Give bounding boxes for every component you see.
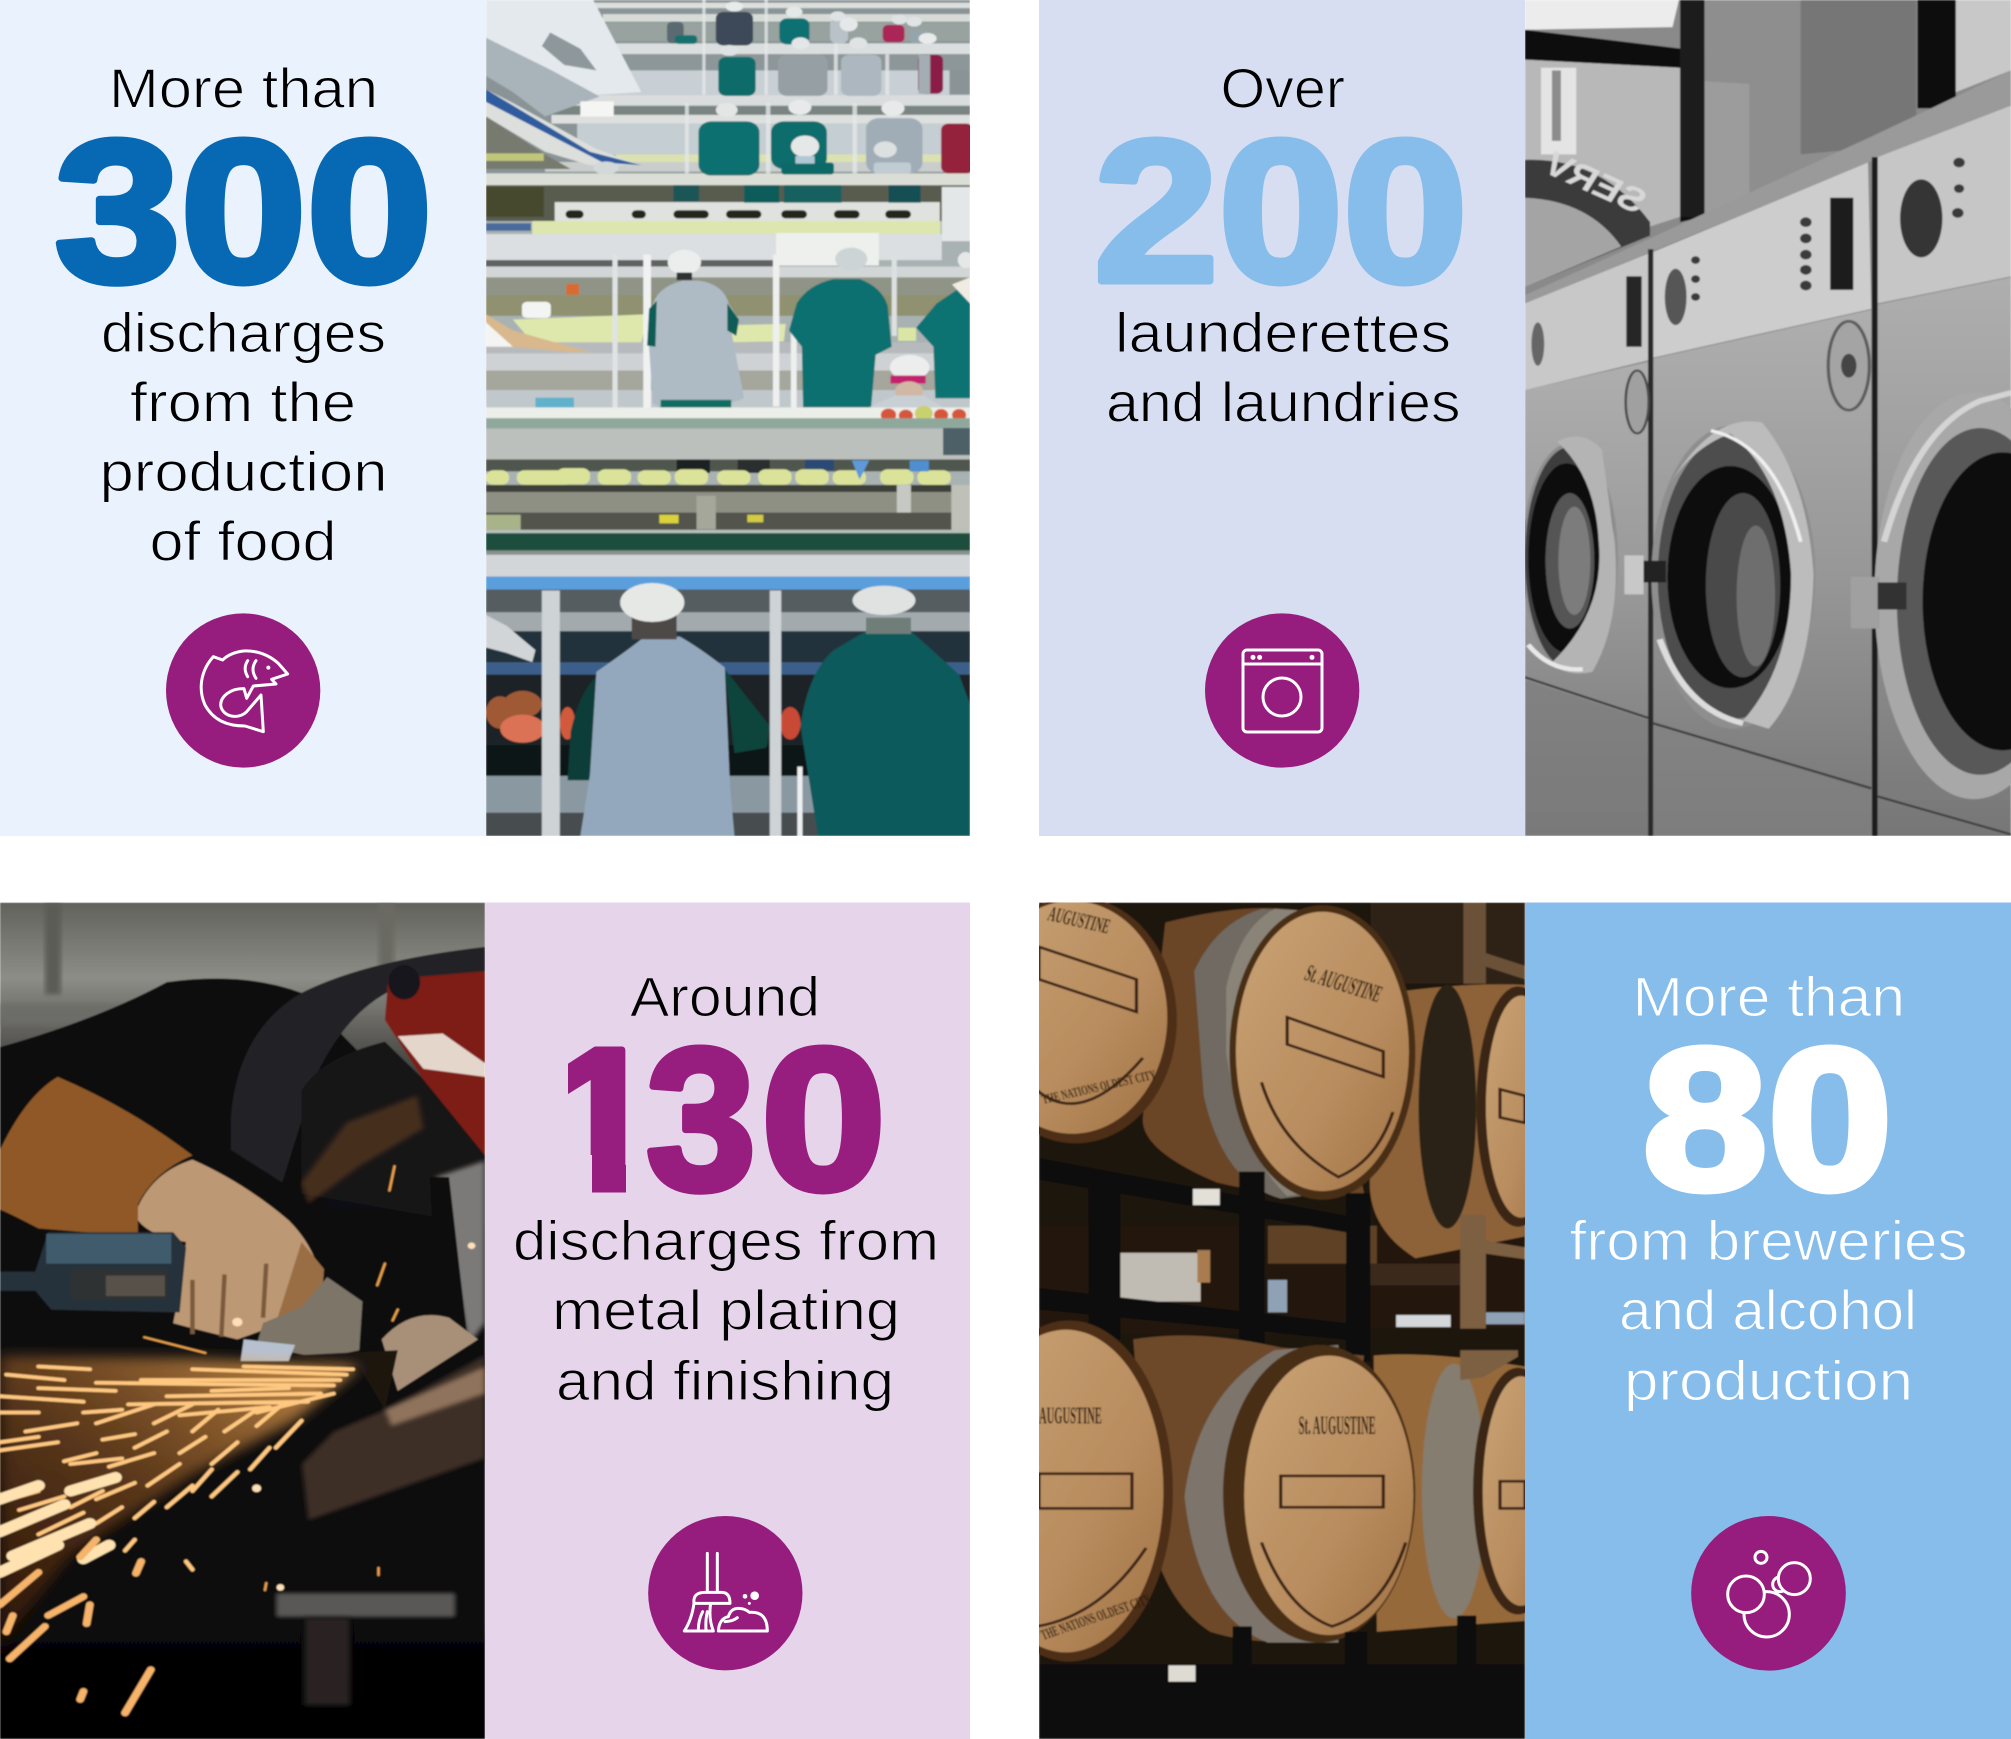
gloves bbox=[0, 1077, 192, 1237]
icon: bubbles bbox=[1691, 1516, 1846, 1671]
text panel background: food bbox=[0, 0, 486, 836]
number: 300: 300 bbox=[54, 98, 432, 324]
barrel stencil text: THE NATIONS OLDEST CITY bbox=[1040, 1068, 1158, 1107]
small workers top bbox=[716, 12, 753, 46]
text: More than: More than bbox=[1632, 965, 1905, 1028]
text: discharges from the production of food bbox=[100, 301, 388, 572]
barrel stencil text: St. AUGUSTINE bbox=[1299, 1412, 1376, 1441]
barrel stencil text: St. AUGUSTINE bbox=[1301, 960, 1386, 1008]
grinder bbox=[0, 1232, 186, 1312]
text panel background: metal bbox=[485, 902, 970, 1739]
number: 80: 80 bbox=[1643, 1006, 1893, 1232]
text: Around: Around bbox=[630, 965, 820, 1028]
text: discharges from metal plating and finishing: and finishing bbox=[556, 1349, 894, 1412]
icon: broom and dust bbox=[648, 1516, 802, 1670]
text: discharges from metal plating and finishing bbox=[513, 1209, 939, 1412]
barrel stencil text: AUGUSTINE bbox=[1039, 1403, 1102, 1430]
panel: food production bbox=[0, 0, 486, 836]
panel: launderettes bbox=[1039, 0, 1525, 836]
text panel background: brewery bbox=[1525, 902, 2011, 1739]
metal pipe bbox=[302, 1356, 485, 1521]
text: from breweries and alcohol production: from breweries bbox=[1570, 1209, 1968, 1272]
text panel background: laundry bbox=[1039, 0, 1525, 836]
number: 200: 200 bbox=[1094, 98, 1468, 324]
text: discharges from the production of food: of food bbox=[150, 510, 336, 572]
number: 130: 0 bbox=[761, 1006, 886, 1232]
text: discharges from metal plating and finishing: discharges from bbox=[513, 1209, 939, 1272]
barrel bodies top bbox=[1143, 908, 1364, 1195]
text: from breweries and alcohol production: and alcohol bbox=[1619, 1279, 1917, 1342]
workers mid bbox=[649, 281, 744, 408]
photo: food production line workers bbox=[486, 0, 970, 836]
panel: metal plating bbox=[485, 902, 970, 1739]
band 2 bbox=[486, 185, 970, 221]
text: Over: Over bbox=[1220, 56, 1345, 120]
icon: washing machine bbox=[1205, 613, 1359, 768]
text: from breweries and alcohol production: production bbox=[1624, 1349, 1913, 1412]
doors bbox=[1522, 443, 1618, 673]
text: launderettes and laundries: launderettes bbox=[1115, 301, 1451, 364]
barrel bodies bottom bbox=[1133, 1335, 1364, 1642]
photo: angle grinder sparks bbox=[0, 902, 485, 1739]
photo: washing machines bbox=[1525, 0, 2011, 836]
number: 130: 1 bbox=[547, 1006, 659, 1232]
photo: washing machines: SERV bbox=[1536, 144, 1654, 220]
barrel stencil marks bbox=[1037, 947, 1525, 1626]
number: 130: 3 bbox=[646, 1006, 756, 1232]
workers bottom bbox=[568, 675, 606, 780]
icon: fish bbox=[166, 613, 320, 768]
photo: whiskey barrels bbox=[1038, 902, 1525, 1739]
text: launderettes and laundries: and laundries bbox=[1106, 370, 1460, 434]
text: from breweries and alcohol production bbox=[1570, 1209, 1968, 1412]
rack base bbox=[1039, 1664, 1525, 1739]
text: More than: More than bbox=[109, 56, 378, 120]
text: discharges from the production of food: production bbox=[100, 440, 388, 503]
rack frames top bbox=[1463, 902, 1486, 984]
barrel stencil text: AUGUSTINE bbox=[1045, 902, 1113, 938]
text: discharges from the production of food: from the bbox=[130, 370, 356, 434]
band: white + bottom bbox=[486, 407, 970, 418]
text: discharges from metal plating and finishing: metal plating bbox=[552, 1279, 900, 1342]
text: discharges from the production of food: discharges bbox=[101, 301, 386, 364]
sparks bbox=[0, 1356, 359, 1648]
barrel stencil text bbox=[1038, 902, 1386, 1643]
text: launderettes and laundries bbox=[1106, 301, 1460, 434]
number: 130 bbox=[540, 1006, 886, 1232]
barrel stencil text: THE NATIONS OLDEST CITY bbox=[1038, 1591, 1154, 1643]
panel: breweries bbox=[1525, 902, 2011, 1739]
